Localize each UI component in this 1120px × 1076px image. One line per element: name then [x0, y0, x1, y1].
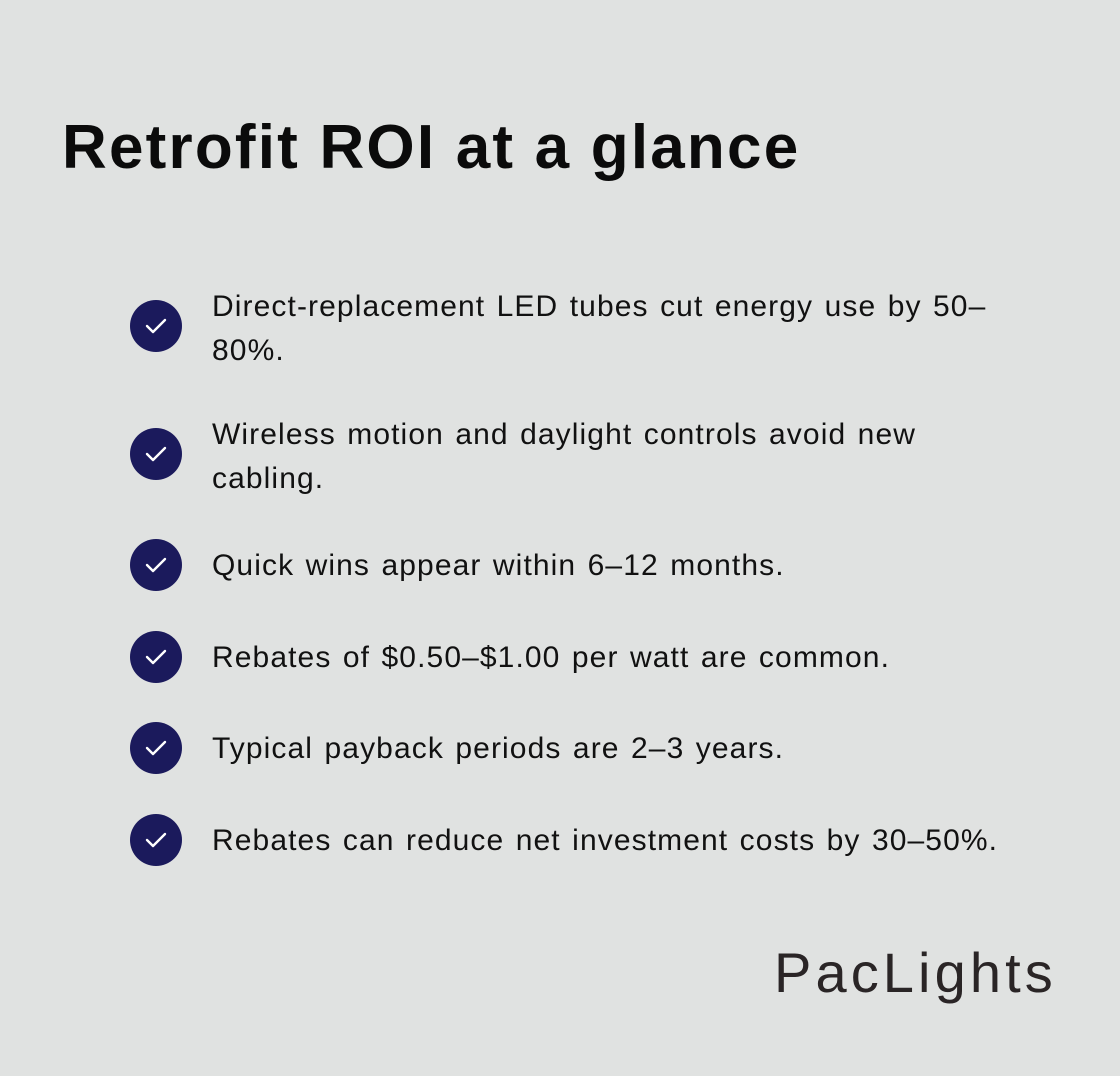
title: Retrofit ROI at a glance: [62, 113, 800, 182]
text: cabling.: [212, 462, 324, 495]
text: 80%.: [212, 334, 285, 367]
text: Rebates can reduce net investment costs by 30–50%.: [212, 824, 998, 857]
icon: check: [130, 631, 182, 683]
icon: check: [130, 300, 182, 352]
list item 1: [130, 290, 986, 367]
text: Rebates of $0.50–$1.00 per watt are common.: [212, 641, 890, 674]
icon: check: [130, 814, 182, 866]
icon: check: [130, 539, 182, 591]
list item 3: [130, 539, 785, 591]
icon: check: [130, 722, 182, 774]
list item 2: [130, 418, 916, 495]
text: Wireless motion and daylight controls avoid new: [212, 418, 916, 451]
list item 4: [130, 631, 890, 683]
text: Quick wins appear within 6–12 months.: [212, 549, 785, 582]
text: [212, 290, 986, 367]
text: Typical payback periods are 2–3 years.: [212, 732, 784, 765]
list item 6: [130, 814, 998, 866]
icon: check: [130, 428, 182, 480]
list item 5: [130, 722, 784, 774]
text: [212, 418, 916, 495]
logo: PacLights: [774, 941, 1057, 1004]
text: Direct-replacement LED tubes cut energy use by 50–: [212, 290, 986, 323]
